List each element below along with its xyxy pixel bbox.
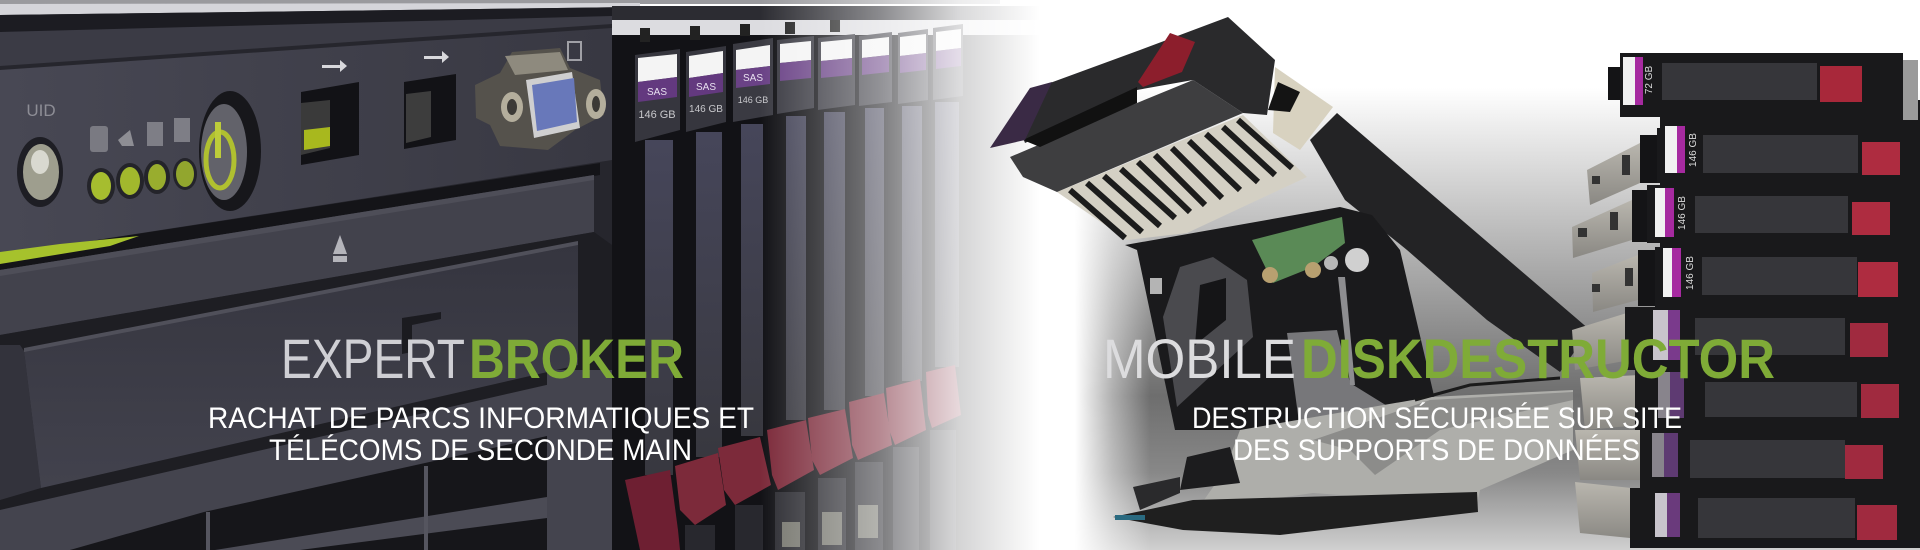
eject tray <box>0 175 594 335</box>
control panel <box>0 28 612 270</box>
text: Mobile Disk Destructor description: DES SUPPORTS DE DONNÉES <box>1233 434 1640 467</box>
top edge of server chassis <box>0 0 1000 66</box>
bay 4 <box>767 36 814 550</box>
diagonal arm <box>1310 113 1590 372</box>
drive 4: 146 GB <box>1685 256 1696 290</box>
eject icon <box>333 235 347 262</box>
top block upper surface <box>1020 17 1275 143</box>
heading: Mobile Disk Destructor: DISKDESTRUCTOR <box>1301 327 1775 390</box>
lower tray <box>0 232 612 550</box>
bay 3: 146 GB <box>738 95 768 105</box>
latch <box>1273 67 1333 150</box>
UID button <box>17 101 63 207</box>
drive 4 <box>1592 247 1920 312</box>
bottom panel with vents <box>0 370 612 550</box>
bay 5 <box>808 34 855 550</box>
text: Mobile Disk Destructor description <box>1192 402 1682 467</box>
top latches <box>612 6 1042 42</box>
panel: stacked drives <box>1572 53 1920 548</box>
text: Mobile Disk Destructor description: DESTRUCTION SÉCURISÉE SUR SITE <box>1192 402 1682 435</box>
stack base <box>1660 100 1920 548</box>
red release button <box>1138 33 1195 87</box>
fade overlay to white <box>760 0 1040 550</box>
status LEDs <box>87 118 197 204</box>
bay 1: SAS <box>647 87 667 98</box>
drive 2: 146 GB <box>1688 133 1699 167</box>
bay 2 <box>675 46 726 550</box>
power button <box>199 91 261 211</box>
bay 6 <box>849 32 892 550</box>
VGA connector <box>475 42 606 150</box>
heading: Mobile Disk Destructor <box>1103 327 1775 390</box>
drive 1 <box>1608 53 1918 120</box>
gray backdrop behind drives <box>1040 0 1920 550</box>
screw <box>1345 248 1369 272</box>
heading: Mobile Disk Destructor: MOBILE <box>1103 327 1296 390</box>
cable <box>1415 378 1560 400</box>
heading: Expert Broker: BROKER <box>469 327 684 390</box>
green light reflection <box>0 236 139 264</box>
UID button: UID <box>26 101 56 120</box>
panel: open tilted drive <box>990 17 1590 535</box>
drive 6 <box>1580 370 1920 430</box>
drive 1: 72 GB <box>1644 66 1655 94</box>
panel: server photo (left) <box>0 0 1000 550</box>
bay 3: SAS <box>743 73 763 84</box>
bay 3 <box>718 38 773 550</box>
bay 1: 146 GB <box>638 109 676 121</box>
connector <box>1180 447 1240 490</box>
connector teeth <box>1057 115 1307 240</box>
bay 2: SAS <box>696 82 716 93</box>
silver bottom plate <box>1197 390 1573 510</box>
heading: Expert Broker: EXPERT <box>281 327 465 390</box>
drive 8 <box>1575 482 1920 548</box>
text: Expert Broker description <box>208 402 754 467</box>
text: Expert Broker description: RACHAT DE PARCS INFORMATIQUES ET <box>208 402 754 435</box>
drive 3: 146 GB <box>1677 196 1688 230</box>
heading: Expert Broker <box>281 327 684 390</box>
label tag <box>990 82 1052 148</box>
bay 7 <box>886 29 928 550</box>
drive 2 <box>1587 126 1920 205</box>
text: Expert Broker description: TÉLÉCOMS DE SECONDE MAIN <box>269 434 692 467</box>
USB ports <box>301 51 456 165</box>
bay 8 <box>926 24 963 550</box>
drive 5 <box>1572 307 1920 370</box>
drive 3 <box>1572 185 1920 258</box>
bay 1 <box>625 49 680 550</box>
drive 7 <box>1575 430 1920 490</box>
circuit board <box>1252 217 1345 283</box>
panel: drive bays <box>612 6 1042 550</box>
debris <box>1113 492 1478 535</box>
top block front face <box>1010 80 1243 192</box>
bay 2: 146 GB <box>689 104 723 115</box>
lower drive body <box>1125 207 1435 430</box>
